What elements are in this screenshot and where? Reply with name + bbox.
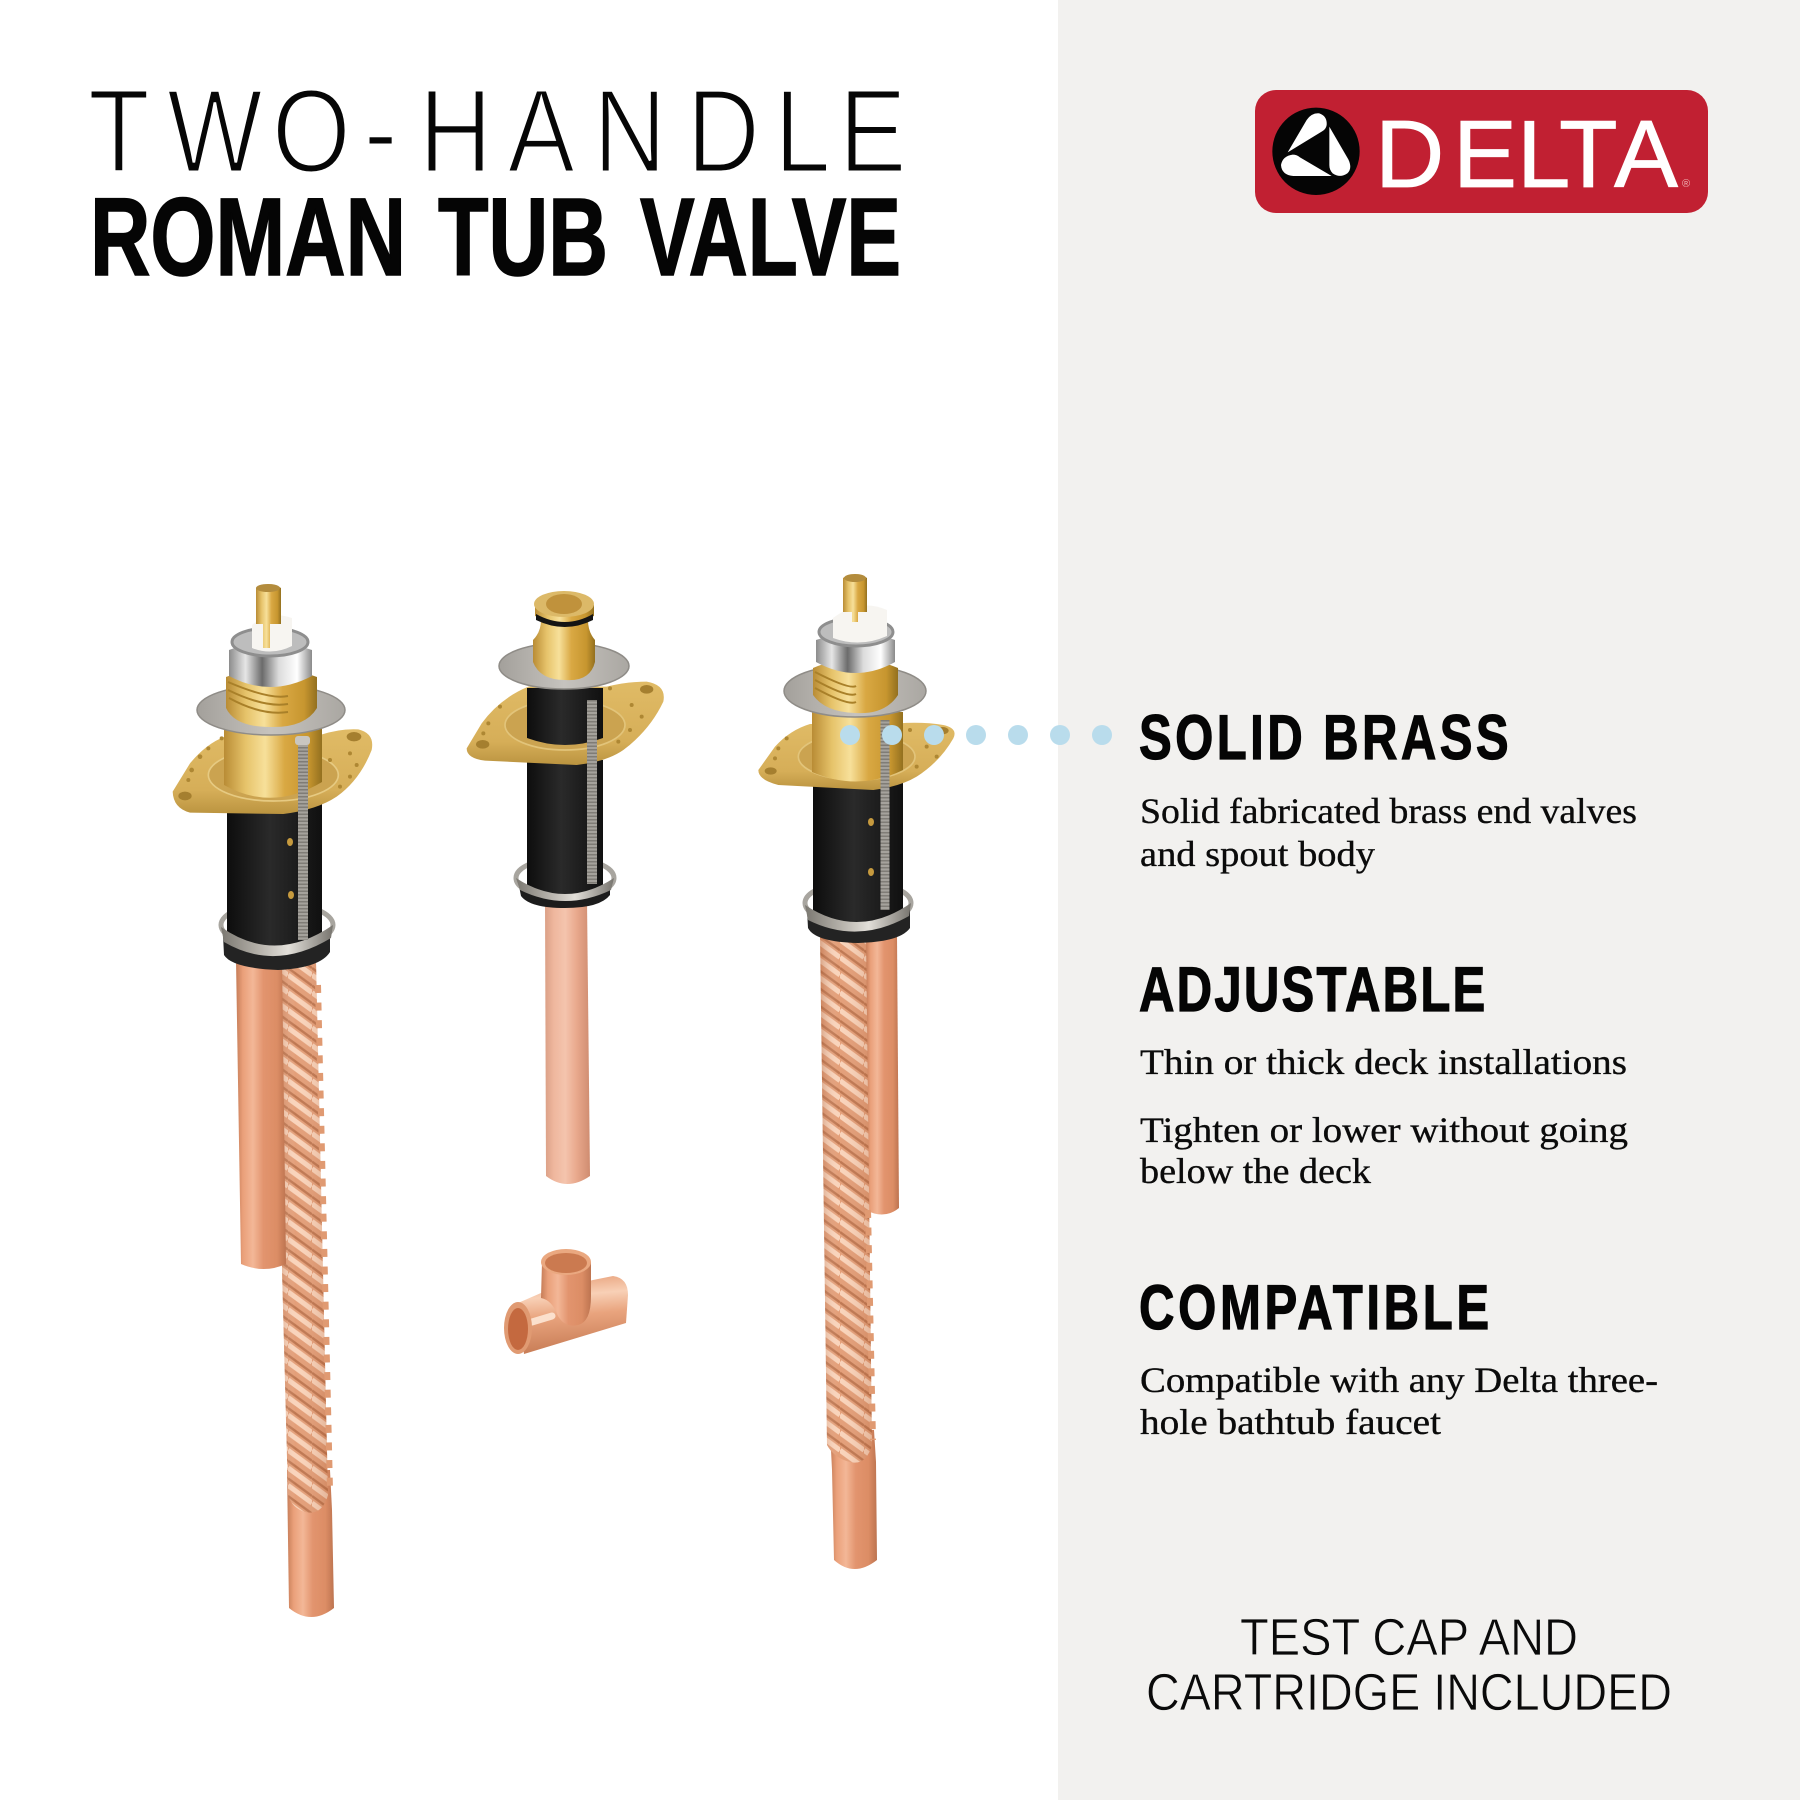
body: adjustable: Thin or thick deck installations	[1140, 1042, 1627, 1082]
straight copper tube	[866, 935, 899, 1215]
copper tube	[545, 900, 590, 1184]
straight copper tube	[236, 960, 286, 1269]
body: adjustable: below the deck	[1140, 1151, 1371, 1191]
chrome nut	[816, 633, 895, 673]
flange plate	[758, 723, 955, 790]
brass body	[224, 725, 322, 798]
note: test cap and cartridge included: CARTRIDGE INCLUDED	[1146, 1664, 1672, 1722]
chrome nut	[229, 642, 312, 687]
body: solid brass: Solid fabricated brass end valves	[1140, 791, 1637, 831]
callout: dotted leader from brass body to solid brass text	[840, 725, 1112, 745]
feature: adjustable	[1139, 954, 1628, 1191]
chrome collar	[232, 628, 308, 656]
brass collar	[534, 591, 594, 627]
body: solid brass: and spout body	[1140, 834, 1375, 874]
black sleeve and ring back	[805, 882, 911, 924]
title	[88, 65, 906, 299]
valve: center spout assembly	[467, 591, 664, 1184]
heading: adjustable: ADJUSTABLE	[1139, 954, 1485, 1024]
mounting screw	[880, 720, 890, 910]
heading: solid brass: SOLID BRASS	[1139, 702, 1509, 772]
lock nut: black base and metal ring	[516, 878, 614, 908]
washer	[197, 685, 345, 735]
valve: right cold-side assembly	[758, 574, 955, 1569]
white cartridge	[252, 615, 292, 652]
panel: right grey column	[1058, 0, 1800, 1800]
brass holes in sleeve	[287, 838, 293, 846]
spiral copper tube	[278, 960, 334, 1617]
lock nut: black base and metal ring	[221, 925, 333, 970]
logo wordmark: DELTA	[1375, 101, 1678, 208]
body: compatible: Compatible with any Delta three-	[1140, 1360, 1658, 1400]
title line 1: light weight: TWO-HANDLE	[88, 65, 906, 198]
body: compatible: hole bathtub faucet	[1140, 1402, 1441, 1442]
upper black sleeve	[527, 688, 603, 745]
title line 2: bold: ROMAN	[90, 176, 406, 299]
title line 2: bold: TUB	[438, 176, 608, 299]
brass body	[812, 712, 903, 782]
logo: Delta red badge	[1255, 90, 1708, 213]
threaded brass nut	[813, 659, 898, 713]
brass holes in sleeve	[868, 818, 874, 826]
heading: compatible: COMPATIBLE	[1139, 1272, 1489, 1342]
title line 2: bold: VALVE	[640, 176, 901, 299]
white cartridge	[833, 606, 887, 643]
copper tee fitting	[504, 1249, 628, 1354]
flange plate	[467, 682, 664, 765]
body: adjustable: Tighten or lower without going	[1140, 1110, 1628, 1150]
mounting screw	[587, 700, 597, 884]
logo mark: black circle with three white lobes	[1272, 108, 1360, 195]
flange plate	[173, 729, 372, 814]
brass stem	[843, 574, 867, 622]
spiral copper tube	[820, 935, 877, 1569]
washer	[499, 643, 629, 689]
note: test cap and cartridge included: TEST CAP AND	[1240, 1609, 1578, 1667]
chrome collar	[819, 618, 893, 646]
black sleeve and ring back	[516, 858, 614, 898]
valve: left hot-side assembly	[173, 584, 372, 1617]
brass connector neck	[533, 620, 595, 680]
washer	[784, 665, 926, 717]
threaded brass nut	[226, 668, 317, 727]
mounting screw	[295, 736, 310, 940]
feature: solid brass	[1139, 702, 1637, 874]
feature: compatible	[1139, 1272, 1658, 1442]
registered mark: ®	[1682, 178, 1690, 190]
black sleeve and ring back	[221, 903, 333, 947]
brass stem	[256, 584, 281, 648]
lock nut: black base and metal ring	[805, 903, 911, 943]
